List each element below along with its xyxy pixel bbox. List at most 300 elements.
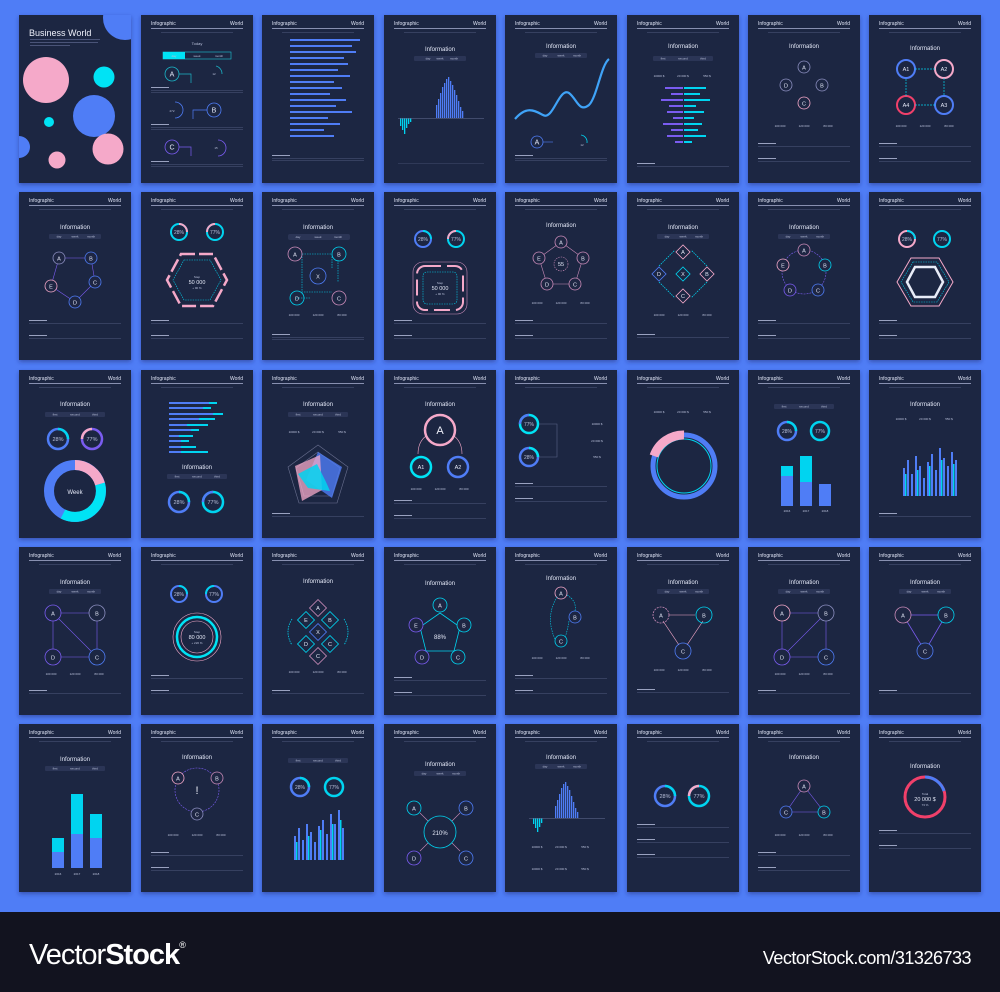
card 3-2: bars + rings: World (230, 376, 243, 382)
card 4-5: A B C vertical: 80 000 (580, 656, 590, 660)
card 5-5: histogram: week (557, 764, 565, 768)
card 4-2: rings + 80 000: Infographic (151, 553, 176, 559)
card 5-5: histogram (505, 724, 617, 892)
card 1-7: circles A B C D (748, 15, 860, 183)
card 4-8: triangle ABC (869, 547, 981, 715)
card 3-8: bar chart: Infographic (879, 376, 904, 382)
card 2-6: diamond network (627, 192, 739, 360)
card 3-7: stacked bars: 28% (782, 429, 793, 435)
card 4-1: square network ABCD: 100 000 (46, 672, 57, 676)
card 2-1: network ABCDE: World (108, 198, 121, 204)
card 3-2: bars + rings: Infographic (151, 376, 176, 382)
card 4-7: square ABCD: 100 000 (775, 672, 786, 676)
card 1-5: wave line: 12 (580, 143, 584, 147)
card 1-6: back-to-back bars: Infographic (637, 21, 662, 27)
card 4-3: diamond network ABCDX: D (304, 642, 308, 648)
card 2-8: rings + hexagon: 77% (937, 237, 948, 243)
card 4-5: A B C vertical: World (594, 553, 607, 559)
card 3-3: radar chart (262, 370, 374, 538)
title: Business World: Business World (29, 28, 91, 38)
card 3-6: big ring (627, 370, 739, 538)
card 1-2: Today A B C: 12 (212, 72, 216, 76)
card 3-7: stacked bars: first (782, 404, 787, 408)
card 2-7: pentagon circle network (748, 192, 860, 360)
card 5-3: rings + bars: first (296, 758, 301, 762)
card 2-7: pentagon circle network: A (802, 248, 806, 254)
card 3-1: rings + Week donut: first (53, 412, 58, 416)
card 1-2: Today A B C: 272 (169, 109, 175, 113)
card 3-7: stacked bars: 2016 (784, 509, 791, 513)
card 3-3: radar chart: second (313, 412, 323, 416)
card 2-1: network ABCDE: Infographic (29, 198, 54, 204)
card 2-3: network X: 100 000 (289, 313, 300, 317)
card 5-4: ABCD 210%: week (436, 772, 444, 776)
card 1-4: histogram: Information (425, 47, 455, 53)
card 5-5: histogram: 550 $ (581, 867, 589, 871)
card 1-8: A1 A2 A3 A4 (869, 15, 981, 183)
card 5-7: triangle C A B: 100 000 (775, 833, 786, 837)
card 3-1: rings + Week donut: second (70, 412, 80, 416)
card 2-6: diamond network: week (679, 234, 687, 238)
card 5-4: ABCD 210%: month (452, 772, 460, 776)
card 1-6: back-to-back bars: Information (668, 44, 698, 50)
card 3-5: 77% 28% stats: 77% (524, 422, 535, 428)
card 3-1: rings + Week donut: 28% (52, 437, 64, 443)
card 5-8: ring 20 000 $ (869, 724, 981, 892)
card 5-1: stacked bars 2016: 2016 (55, 872, 62, 876)
card 4-8: triangle ABC: C (923, 650, 927, 656)
card 3-5: 77% 28% stats: 20 000 $ (591, 439, 603, 443)
card 4-7: square ABCD: 120 000 (799, 672, 810, 676)
card 4-1: square network ABCD: month (87, 590, 95, 594)
card 5-8: ring 20 000 $: 20 000 $ (914, 797, 936, 803)
card 4-2: rings + 80 000: 28% (174, 592, 185, 598)
card 5-3: rings + bars: Infographic (272, 730, 297, 736)
card 2-3: network X: X (316, 274, 320, 280)
card 2-4: rings + rounded square: + 90 % (435, 292, 445, 296)
card 2-1: network ABCDE: C (93, 280, 97, 286)
card 5-7: triangle C A B: 120 000 (799, 833, 810, 837)
card 4-6: triangle ABC: 80 000 (702, 668, 712, 672)
card 2-1: network ABCDE: Information (60, 225, 90, 231)
card 1-6: back-to-back bars: World (716, 21, 729, 27)
card 2-3: network X: week (314, 235, 322, 239)
card 1-8: A1 A2 A3 A4: A3 (941, 103, 947, 109)
card 1-7: circles A B C D: D (784, 84, 788, 90)
card 3-3: radar chart: World (351, 376, 364, 382)
card 5-5: histogram: month (573, 764, 581, 768)
card 2-8: rings + hexagon (869, 192, 981, 360)
card 4-5: A B C vertical: Information (546, 576, 576, 582)
card 2-2: rings + hexagon 50 000: + 90 % (192, 286, 202, 290)
card 1-3: horizontal bar chart: World (351, 21, 364, 27)
card 3-3: radar chart: third (335, 412, 341, 416)
card 5-1: stacked bars 2016: Infographic (29, 730, 54, 736)
card 3-6: big ring: 10000 $ (654, 410, 665, 414)
card 2-6: diamond network: C (681, 294, 685, 300)
card 2-4: rings + rounded square: World (473, 198, 486, 204)
card 2-6: diamond network: 120 000 (678, 313, 689, 317)
card 2-5: pentagon 55: E (537, 256, 541, 262)
card 4-5: A B C vertical (505, 547, 617, 715)
card 3-1: rings + Week donut: World (108, 376, 121, 382)
card 3-4: A A1 A2: A1 (418, 465, 424, 471)
card 3-3: radar chart: Information (303, 402, 333, 408)
card 5-8: ring 20 000 $: Information (910, 764, 940, 770)
card 5-8: ring 20 000 $: 73 % (922, 803, 929, 807)
card 3-4: A A1 A2: 120 000 (435, 487, 446, 491)
card 4-3: diamond network ABCDX: World (351, 553, 364, 559)
card 5-2: ! circle: World (230, 730, 243, 736)
card 3-5: 77% 28% stats: 550 $ (593, 455, 601, 459)
card 3-4: A A1 A2: Information (425, 402, 455, 408)
card 1-3: horizontal bar chart: Infographic (272, 21, 297, 27)
card 2-3: network X: Infographic (272, 198, 297, 204)
card 3-8: bar chart: 550 $ (945, 417, 953, 421)
card 4-3: diamond network ABCDX: B (328, 618, 332, 624)
card 4-1: square network ABCD: C (95, 656, 99, 662)
card 5-5: histogram: 10000 $ (532, 867, 543, 871)
card 4-4: pentagon 88% (384, 547, 496, 715)
card 3-8: bar chart: 20 000 $ (919, 417, 931, 421)
card 5-5: histogram: 10000 $ (532, 845, 543, 849)
card 1-5: wave line (505, 15, 617, 183)
card 1-5: wave line: Infographic (515, 21, 540, 27)
footer: VectorStock logo: VectorStock (29, 939, 179, 971)
card 2-1: network ABCDE: day (57, 234, 62, 238)
card 2-6: diamond network: X (681, 272, 685, 278)
card 2-3: network X: B (337, 252, 341, 258)
card 2-6: diamond network: B (705, 272, 709, 278)
card 5-3: rings + bars: 28% (295, 785, 306, 791)
card 4-6: triangle ABC: A (659, 614, 663, 620)
card 1-4: histogram: month (450, 56, 458, 60)
card 2-5: pentagon 55: Information (546, 223, 576, 229)
card 2-5: pentagon 55: 120 000 (556, 301, 567, 305)
card 5-3: rings + bars: second (313, 758, 323, 762)
card 2-3: network X: 120 000 (313, 313, 324, 317)
card 4-4: pentagon 88%: A (438, 604, 442, 610)
card 5-1: stacked bars 2016: second (70, 766, 80, 770)
card 5-1: stacked bars 2016: 2017 (74, 872, 81, 876)
card 4-1: square network ABCD: B (95, 612, 99, 618)
card 2-6: diamond network: day (665, 234, 670, 238)
card 3-1: rings + Week donut (19, 370, 131, 538)
card 4-3: diamond network ABCDX: A (316, 606, 320, 612)
card 5-4: ABCD 210%: B (464, 806, 468, 812)
card 4-6: triangle ABC: 100 000 (654, 668, 665, 672)
card 3-3: radar chart: 10000 $ (289, 430, 300, 434)
card 5-6: rings + text: Infographic (637, 730, 662, 736)
card 4-7: square ABCD: Infographic (758, 553, 783, 559)
card 5-1: stacked bars 2016: third (92, 766, 98, 770)
card 3-1: rings + Week donut: Week (67, 490, 84, 496)
card 2-5: pentagon 55: 55 (558, 262, 564, 268)
card 5-1: stacked bars 2016: World (108, 730, 121, 736)
card 4-4: pentagon 88%: Infographic (394, 553, 419, 559)
card 4-8: triangle ABC: B (944, 614, 948, 620)
card 1-5: wave line: World (594, 21, 607, 27)
card 1-5: wave line: week (557, 54, 565, 58)
card 5-7: triangle C A B: 80 000 (823, 833, 833, 837)
card 5-4: ABCD 210%: World (473, 730, 486, 736)
card 3-7: stacked bars: Infographic (758, 376, 783, 382)
card 4-4: pentagon 88%: 88% (434, 635, 447, 641)
card 4-6: triangle ABC: Infographic (637, 553, 662, 559)
card 1-2: Today A B C: day (172, 54, 177, 58)
card 3-4: A A1 A2: A2 (455, 465, 461, 471)
card 1-2: Today A B C: A (170, 72, 175, 78)
card 1-6: back-to-back bars: second (678, 56, 688, 60)
card 2-7: pentagon circle network: D (788, 288, 792, 294)
card 1-7: circles A B C D: A (802, 66, 806, 72)
card 2-7: pentagon circle network: day (786, 234, 791, 238)
card 2-4: rings + rounded square: 28% (418, 237, 429, 243)
card 2-5: pentagon 55: 80 000 (580, 301, 590, 305)
card 5-4: ABCD 210% (384, 724, 496, 892)
card 5-2: ! circle: 120 000 (192, 833, 203, 837)
card 2-6: diamond network: Infographic (637, 198, 662, 204)
card 4-6: triangle ABC: 120 000 (678, 668, 689, 672)
card 4-4: pentagon 88%: D (420, 656, 424, 662)
card 4-4: pentagon 88%: C (456, 656, 460, 662)
card 2-2: rings + hexagon 50 000: Infographic (151, 198, 176, 204)
card 3-4: A A1 A2: A (436, 425, 444, 437)
card 5-1: stacked bars 2016: Information (60, 757, 90, 763)
card 1-7: circles A B C D: 80 000 (823, 124, 833, 128)
card 2-2: rings + hexagon 50 000: 28% (174, 230, 185, 236)
card 5-8: ring 20 000 $: Infographic (879, 730, 904, 736)
card 4-2: rings + 80 000: 80 000 (189, 635, 205, 641)
card 4-2: rings + 80 000: Step (194, 630, 200, 634)
card 4-1: square network ABCD (19, 547, 131, 715)
card 5-4: ABCD 210%: Infographic (394, 730, 419, 736)
card 4-3: diamond network ABCDX: X (316, 630, 320, 636)
card 2-6: diamond network: month (695, 234, 703, 238)
card 5-7: triangle C A B (748, 724, 860, 892)
card 2-4: rings + rounded square (384, 192, 496, 360)
card 4-7: square ABCD: week (800, 590, 808, 594)
card 4-7: square ABCD: A (780, 612, 784, 618)
card 2-7: pentagon circle network: World (837, 198, 850, 204)
card 3-8: bar chart (869, 370, 981, 538)
card 5-3: rings + bars (262, 724, 374, 892)
card 4-1: square network ABCD: 120 000 (70, 672, 81, 676)
card 5-5: histogram: Information (546, 755, 576, 761)
card 5-4: ABCD 210%: C (464, 856, 468, 862)
card 3-2: bars + rings: second (192, 474, 202, 478)
card 4-1: square network ABCD: day (57, 590, 62, 594)
card 2-5: pentagon 55: World (594, 198, 607, 204)
card 3-4: A A1 A2: Infographic (394, 376, 419, 382)
card 2-7: pentagon circle network: week (800, 234, 808, 238)
card 4-5: A B C vertical: A (559, 592, 563, 598)
card 4-7: square ABCD: 80 000 (823, 672, 833, 676)
card 4-3: diamond network ABCDX: E (304, 618, 308, 624)
footer bar (0, 912, 1000, 992)
card 4-3: diamond network ABCDX (262, 547, 374, 715)
card 3-5: 77% 28% stats: World (594, 376, 607, 382)
card 4-2: rings + 80 000: + 220 % (191, 641, 203, 645)
card 3-4: A A1 A2 (384, 370, 496, 538)
card 5-3: rings + bars: 77% (329, 785, 340, 791)
card 3-2: bars + rings: Information (182, 465, 212, 471)
card 1-6: back-to-back bars: 550 $ (703, 74, 711, 78)
card 5-7: triangle C A B: A (802, 784, 806, 790)
card 4-6: triangle ABC: day (665, 590, 670, 594)
card 2-5: pentagon 55: B (581, 256, 585, 262)
card 2-7: pentagon circle network: Information (789, 225, 819, 231)
card 1-8: A1 A2 A3 A4: A1 (903, 67, 909, 73)
card 3-1: rings + Week donut: 77% (86, 437, 98, 443)
card 2-7: pentagon circle network: month (816, 234, 824, 238)
card 1-7: circles A B C D: 120 000 (799, 124, 810, 128)
card 1-7: circles A B C D: 100 000 (775, 124, 786, 128)
card 2-6: diamond network: 80 000 (702, 313, 712, 317)
card 1-2: Today A B C: Today (192, 41, 202, 46)
card 3-5: 77% 28% stats (505, 370, 617, 538)
card 3-7: stacked bars (748, 370, 860, 538)
card 5-4: ABCD 210%: Information (425, 762, 455, 768)
card 3-2: bars + rings (141, 370, 253, 538)
card 1-4: histogram: Infographic (394, 21, 419, 27)
card 2-4: rings + rounded square: 50 000 (432, 286, 448, 292)
card 4-6: triangle ABC: week (679, 590, 687, 594)
card 1-8: A1 A2 A3 A4: Information (910, 46, 940, 52)
card 5-2: ! circle: C (195, 812, 199, 818)
card 3-2: bars + rings: first (175, 474, 180, 478)
card 4-3: diamond network ABCDX: C (328, 642, 332, 648)
card 2-8: rings + hexagon: Infographic (879, 198, 904, 204)
card 3-3: radar chart: first (296, 412, 301, 416)
card 4-2: rings + 80 000: 77% (209, 592, 220, 598)
card 2-6: diamond network: A (681, 250, 685, 256)
card 4-7: square ABCD: month (816, 590, 824, 594)
card 4-1: square network ABCD: Infographic (29, 553, 54, 559)
card 3-8: bar chart: Information (910, 402, 940, 408)
card 2-2: rings + hexagon 50 000: 77% (210, 230, 221, 236)
card 1-2: Today A B C: week (193, 54, 201, 58)
card 4-2: rings + 80 000 (141, 547, 253, 715)
card 3-8: bar chart: 10000 $ (896, 417, 907, 421)
card 5-2: ! circle: 80 000 (216, 833, 226, 837)
card 2-7: pentagon circle network: E (781, 264, 785, 270)
card 5-5: histogram: 20 000 $ (555, 867, 567, 871)
card 2-4: rings + rounded square: Step (437, 281, 443, 285)
card 5-2: ! circle: B (215, 776, 219, 782)
card 3-7: stacked bars: third (821, 404, 827, 408)
card 1-6: back-to-back bars: 20 000 $ (677, 74, 689, 78)
card 1-8: A1 A2 A3 A4: 80 000 (944, 124, 954, 128)
card 1-7: circles A B C D: C (802, 102, 806, 108)
card 3-2: bars + rings: 28% (173, 500, 185, 506)
card 5-6: rings + text (627, 724, 739, 892)
card 3-7: stacked bars: second (799, 404, 809, 408)
card 3-7: stacked bars: 77% (815, 429, 826, 435)
card 4-1: square network ABCD: World (108, 553, 121, 559)
card 5-4: ABCD 210%: day (422, 772, 427, 776)
card 1-8: A1 A2 A3 A4: 100 000 (896, 124, 907, 128)
card 3-1: rings + Week donut: Information (60, 402, 90, 408)
card 5-7: triangle C A B: Infographic (758, 730, 783, 736)
card 5-8: ring 20 000 $: World (958, 730, 971, 736)
card 4-1: square network ABCD: D (51, 656, 55, 662)
card 1-2: Today A B C: B (212, 108, 217, 114)
card 2-2: rings + hexagon 50 000: Step (194, 275, 200, 279)
card 1-2: Today A B C (141, 15, 253, 183)
card 3-7: stacked bars: 2018 (822, 509, 829, 513)
card 2-7: pentagon circle network: C (816, 288, 820, 294)
card 2-6: diamond network: 100 000 (654, 313, 665, 317)
card 2-3: network X: month (334, 235, 342, 239)
card 2-6: diamond network: Information (668, 225, 698, 231)
card 1-2: Today A B C: Infographic (151, 21, 176, 27)
card 5-6: rings + text: World (716, 730, 729, 736)
card 4-7: square ABCD: Information (789, 580, 819, 586)
card 4-3: diamond network ABCDX: 120 000 (313, 670, 324, 674)
card 4-3: diamond network ABCDX: 80 000 (337, 670, 347, 674)
card 4-1: square network ABCD: week (71, 590, 79, 594)
card 4-4: pentagon 88%: World (473, 553, 486, 559)
card 1-4: histogram: World (473, 21, 486, 27)
card 3-7: stacked bars: World (837, 376, 850, 382)
card 4-8: triangle ABC: Infographic (879, 553, 904, 559)
card 1-2: Today A B C: World (230, 21, 243, 27)
card 4-5: A B C vertical: 120 000 (556, 656, 567, 660)
card 2-5: pentagon 55 (505, 192, 617, 360)
card 4-3: diamond network ABCDX: C (316, 654, 320, 660)
card 4-8: triangle ABC: week (921, 590, 929, 594)
card 2-7: pentagon circle network: Infographic (758, 198, 783, 204)
card 4-7: square ABCD: B (824, 612, 828, 618)
card 1-4: histogram: day (426, 56, 431, 60)
card 2-6: diamond network: World (716, 198, 729, 204)
card 1-8: A1 A2 A3 A4: A4 (903, 103, 909, 109)
card 1-5: wave line: day (543, 54, 548, 58)
card 4-7: square ABCD: World (837, 553, 850, 559)
card 3-1: rings + Week donut: third (92, 412, 98, 416)
card 4-8: triangle ABC: Information (910, 580, 940, 586)
card 2-1: network ABCDE: month (87, 234, 95, 238)
card 5-1: stacked bars 2016: first (53, 766, 58, 770)
card 1-8: A1 A2 A3 A4: World (958, 21, 971, 27)
card 3-6: big ring: 550 $ (703, 410, 711, 414)
card 2-4: rings + rounded square: 77% (451, 237, 462, 243)
card 3-8: bar chart: World (958, 376, 971, 382)
card 2-3: network X: 80 000 (337, 313, 347, 317)
card 5-7: triangle C A B: B (822, 810, 826, 816)
card 4-7: square ABCD: day (786, 590, 791, 594)
card 3-2: bars + rings: third (214, 474, 220, 478)
card 2-1: network ABCDE: D (73, 300, 77, 306)
card 2-1: network ABCDE: week (71, 234, 79, 238)
card 4-8: triangle ABC: month (937, 590, 945, 594)
card 4-1: square network ABCD: A (51, 612, 55, 618)
card 5-4: ABCD 210%: 210% (432, 831, 448, 837)
card 4-5: A B C vertical: B (573, 616, 577, 622)
card 5-8: ring 20 000 $: Total (922, 792, 928, 796)
card 1-5: wave line: Information (546, 44, 576, 50)
card 2-1: network ABCDE: B (89, 256, 93, 262)
card 2-5: pentagon 55: A (559, 240, 563, 246)
card 4-1: square network ABCD: 80 000 (94, 672, 104, 676)
card 4-4: pentagon 88%: Information (425, 581, 455, 587)
card 2-2: rings + hexagon 50 000 (141, 192, 253, 360)
card 5-2: ! circle: ! (195, 785, 199, 797)
card 3-3: radar chart: 20 000 $ (312, 430, 324, 434)
card 3-4: A A1 A2: 100 000 (411, 487, 422, 491)
card 1-7: circles A B C D: B (820, 84, 824, 90)
